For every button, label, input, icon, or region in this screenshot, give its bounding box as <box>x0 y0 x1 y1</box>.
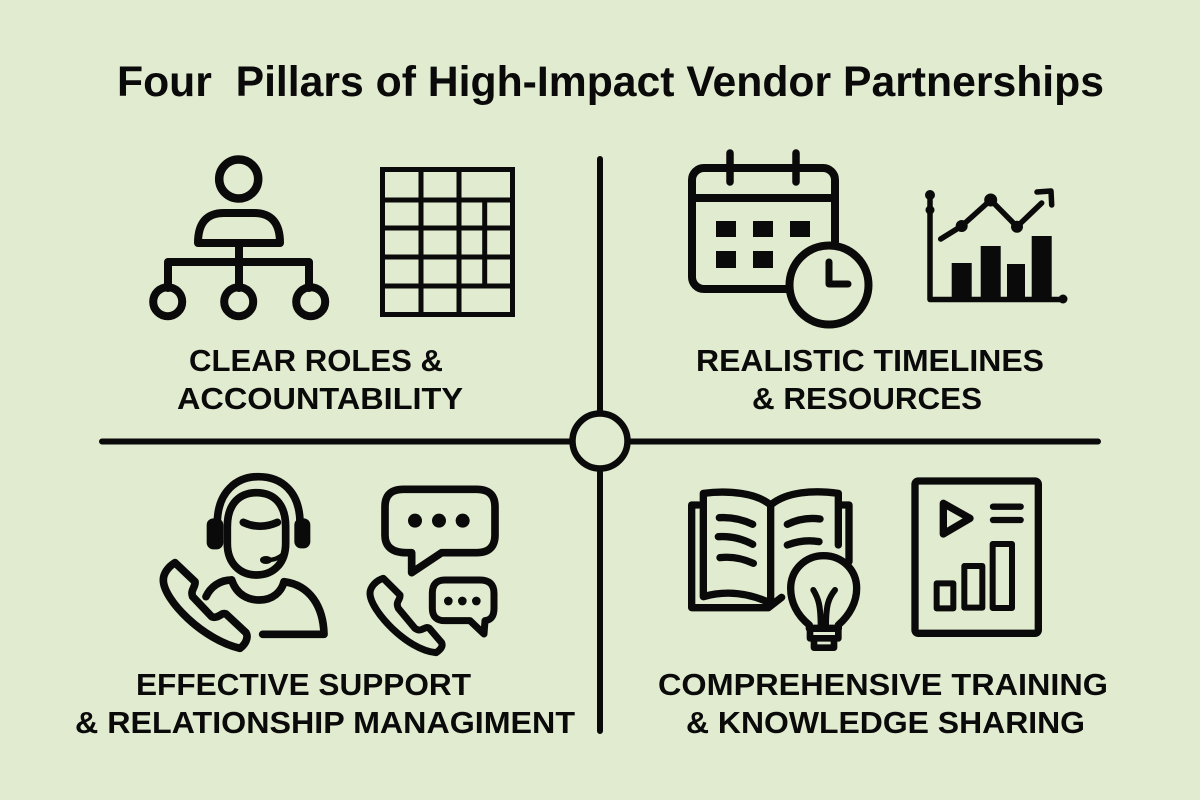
label: comprehensive training <box>658 667 1108 740</box>
label: realistic timelines: & RESOURCES <box>752 381 982 416</box>
icon: support agent with headset and phone <box>163 477 324 648</box>
label: comprehensive training: & KNOWLEDGE SHARING <box>686 705 1085 740</box>
label: effective support: & RELATIONSHIP MANAGIMENT <box>75 705 575 740</box>
icon: organisation chart <box>153 160 325 316</box>
title: Four Pillars of High-Impact Vendor Partnerships <box>117 59 1104 106</box>
icon: speech bubbles and phone <box>370 489 495 653</box>
icon: grid table <box>382 169 513 315</box>
icon: open book with light bulb <box>692 492 857 648</box>
icon: video and bar chart panel <box>915 481 1038 633</box>
icon: calendar with clock <box>692 153 868 324</box>
label: clear roles: ACCOUNTABILITY <box>177 381 463 416</box>
label: realistic timelines: REALISTIC TIMELINES <box>696 343 1044 378</box>
panel: realistic timelines and resources <box>692 153 1068 416</box>
panel: clear roles and accountability <box>153 160 513 416</box>
label: effective support: EFFECTIVE SUPPORT <box>136 667 471 702</box>
label: comprehensive training: COMPREHENSIVE TRAINING <box>658 667 1108 702</box>
panel: comprehensive training and knowledge sharing <box>658 481 1108 740</box>
icon: combined bar and line chart <box>925 190 1068 304</box>
label: clear roles <box>177 343 463 416</box>
label: clear roles: CLEAR ROLES & <box>189 343 443 378</box>
label: realistic timelines <box>696 343 1044 416</box>
panel: effective support and relationship management <box>75 477 575 740</box>
label: effective support <box>75 667 575 740</box>
quadrant divider cross <box>102 159 1098 731</box>
